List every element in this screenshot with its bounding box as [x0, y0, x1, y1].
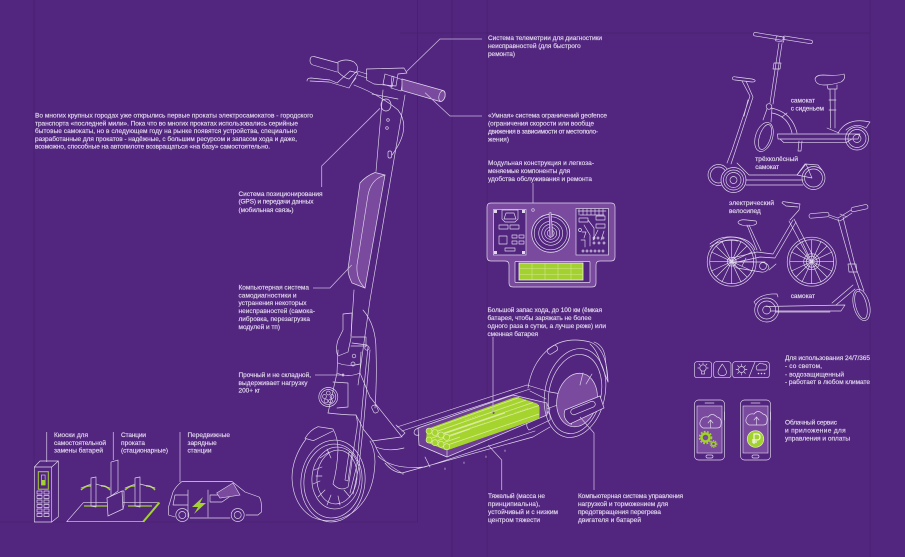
icon: kiosk: [34, 461, 58, 522]
intro text: разработанные для прокатов - надёжные, с большим ресурсом и запасом хода и даже,: [35, 135, 297, 143]
label: electric bicycle: электрический: [729, 199, 774, 207]
right circuit board: [576, 208, 608, 255]
label: all-weather use: - со светом,: [785, 363, 822, 370]
label: battery range: одного раза в сутки, а лучше реже) или: [488, 323, 606, 330]
label: three-wheel scooter: самокат: [755, 164, 779, 171]
label: scooter with seat: [791, 98, 825, 112]
icon: light bulb: [694, 362, 712, 378]
battery cells: [414, 397, 550, 457]
label: telemetry: ремонта): [488, 51, 515, 58]
label: heavy: устойчивый и с низким: [488, 508, 559, 516]
leader lines: [313, 39, 594, 490]
label: mobile charging stations: [180, 432, 230, 482]
label: all-weather use: Для использования 24/7/365: [785, 355, 870, 362]
label: battery range: сменная батарея: [488, 330, 538, 338]
label: GPS: [238, 191, 323, 214]
label: strong: [238, 371, 311, 394]
label: GPS: (GPS) и передачи данных: [238, 199, 314, 206]
label: self-diagnostics: либровка, перезагрузка: [238, 315, 310, 323]
main scooter illustration: [292, 56, 614, 525]
label: electric bicycle: велосипед: [729, 208, 761, 215]
label: battery kiosks: самостоятельной: [54, 439, 106, 447]
label: control system: предотвращения перегрева: [578, 509, 661, 516]
label: control system: нагрузкой и торможением для: [578, 500, 668, 508]
folding scooter: [754, 204, 873, 322]
label: cloud service: [785, 418, 850, 442]
label: telemetry: неисправностей (для быстрого: [488, 42, 581, 50]
label: control system: Компьютерная система управления: [578, 493, 683, 500]
label: rental stations: [113, 432, 168, 460]
icon: ruble coin: [747, 431, 764, 447]
intro text: бытовые самокаты, но в следующем году на рынке появятся устройства, специально: [35, 127, 297, 135]
label: battery range: Большой запас хода, до 100 км (ёмкая: [488, 306, 602, 314]
label: battery kiosks: [47, 432, 106, 462]
label: strong: 200+ кг: [238, 388, 261, 394]
label: all-weather use: - работает в любом климате: [785, 378, 870, 386]
phone: cloud service settings: [694, 400, 724, 460]
intro text: Во многих крупных городах уже открылись первые прокаты электросамокатов - городского: [35, 112, 313, 120]
label: geofence: [488, 112, 607, 144]
battery pack on stem: [348, 172, 385, 288]
label: telemetry: Система телеметрии для диагностики: [488, 35, 602, 42]
label: self-diagnostics: самодиагностики и: [238, 292, 297, 300]
icon: charging van: [168, 482, 262, 522]
label: self-diagnostics: устранения некоторых: [238, 300, 307, 307]
label: GPS: Система позиционирования: [238, 191, 323, 198]
label: folding scooter: самокат: [791, 293, 815, 300]
label: heavy: принципиальна),: [488, 501, 540, 508]
scooter handlebar and stem: [307, 56, 446, 300]
label: self-diagnostics: модулей и тп): [238, 323, 280, 331]
module panel: [487, 203, 615, 287]
label: cloud service: Облачный сервис: [785, 418, 838, 426]
label: modular: [488, 160, 594, 183]
three-wheel scooter: [708, 77, 825, 192]
label: heavy: Тяжелый (масса не: [488, 492, 545, 500]
intro text: транспорта «последней мили». Пока что во многих прокатах использовались серийные: [35, 119, 298, 127]
label: battery kiosks: Киоски для: [54, 432, 88, 439]
label: battery range: батарея, чтобы заряжать не более: [488, 314, 592, 322]
icon: water drop: [714, 362, 731, 378]
rear wheel and fender: [528, 340, 614, 443]
label: battery range: [488, 306, 606, 338]
label: mobile charging stations: зарядные: [188, 440, 217, 447]
label: geofence: «Умная» система ограничений geofence: [488, 112, 607, 120]
removable battery block: [515, 262, 590, 282]
label: GPS: (мобильная связь): [238, 206, 294, 214]
intro text: возможно, способные на автопилоте возвращаться «на базу» самостоятельно.: [35, 143, 270, 151]
front wheel: [292, 437, 375, 525]
label: heavy: [488, 492, 559, 524]
icon: sun and snow cloud: [733, 362, 769, 378]
battery compartment: [418, 395, 547, 457]
label: control system: [578, 493, 683, 524]
label: geofence: движения в зависимости от местополо-: [488, 128, 598, 136]
label: battery kiosks: замены батарей: [54, 446, 103, 454]
label: three-wheel scooter: [755, 155, 798, 171]
intro text: [35, 112, 313, 151]
icon row: weather proofing: [694, 362, 769, 378]
label: scooter with seat: самокат: [791, 98, 815, 104]
label: modular: удобства обслуживания и ремонта: [488, 175, 592, 183]
label: heavy: центром тяжести: [488, 517, 540, 524]
label: all-weather use: - водозащищенный: [785, 370, 844, 378]
scooter with seat: [751, 32, 870, 154]
central motor: [532, 212, 570, 252]
label: geofence: жения): [488, 136, 509, 144]
left circuit board: [494, 210, 526, 255]
label: rental stations: Станции: [121, 432, 146, 439]
label: cloud service: и приложение для: [785, 428, 846, 434]
label: geofence: (ограничения скорости или вообще: [488, 120, 594, 128]
electric bicycle: [707, 202, 836, 286]
label: electric bicycle: [729, 199, 774, 215]
icon: green gears: [700, 432, 717, 447]
label: control system: двигателя и батарей: [578, 516, 641, 524]
label: self-diagnostics: Компьютерная система: [238, 284, 309, 292]
label: telemetry: [488, 35, 602, 58]
label: mobile charging stations: станции: [188, 448, 212, 454]
label: cloud service: управления и оплаты: [785, 436, 850, 442]
label: strong: выдерживает нагрузку: [238, 380, 308, 387]
label: modular: меняемые компоненты для: [488, 168, 570, 175]
deck: [378, 385, 567, 474]
scooter neck and fork: [305, 290, 405, 494]
label: all-weather use: [785, 355, 870, 386]
phone: cloud service payment: [740, 400, 770, 460]
label: rental stations: (стационарные): [121, 448, 168, 454]
icon: station rack: [67, 460, 159, 522]
label: strong: Прочный и не складной,: [238, 371, 311, 379]
label: modular: Модульная конструкция и легкоза-: [488, 160, 594, 167]
label: mobile charging stations: Передвижные: [188, 432, 230, 439]
label: scooter with seat: с сиденьем: [791, 106, 825, 112]
label: self-diagnostics: неисправностей (самока-: [238, 307, 315, 315]
label: three-wheel scooter: трёхколёсный: [755, 155, 798, 163]
label: rental stations: проката: [121, 440, 145, 447]
label: self-diagnostics: [238, 284, 315, 331]
